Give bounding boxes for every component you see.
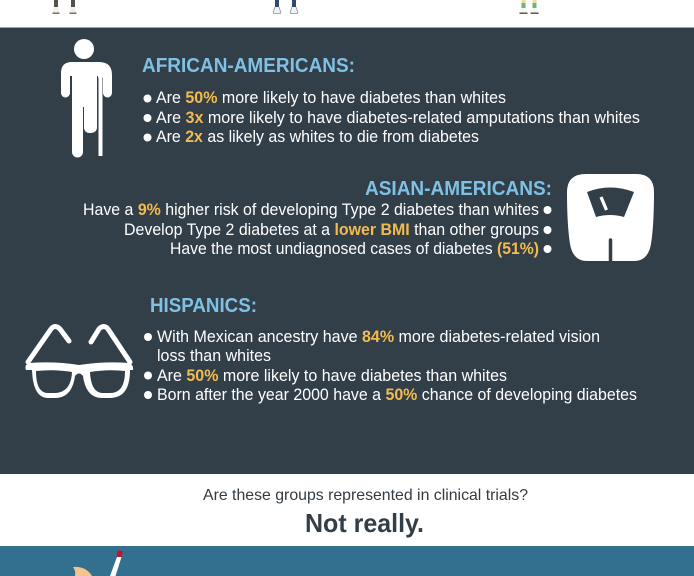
panel: blue bottom band	[0, 546, 694, 576]
heading: Asian-Americans: ASIAN-AMERICANS:	[365, 178, 552, 200]
text block: African-American facts: Are 2x as likely as whites to die from diabetes	[156, 127, 479, 146]
text block: Hispanic facts: Born after the year 2000 have a 50% chance of developing diabetes	[157, 385, 637, 404]
text block: Hispanic facts: Are 50% more likely to have diabetes than whites	[157, 366, 507, 385]
text block: African-American facts: Are 50% more likely to have diabetes than whites	[156, 88, 506, 107]
icon: person with amputated leg and crutch	[61, 39, 112, 158]
icon: lancet	[110, 550, 123, 576]
panel: dark demographics panel	[0, 27, 694, 474]
text block: Hispanic facts: loss than whites	[157, 346, 271, 365]
text block: Asian-American facts: Have a 9% higher risk of developing Type 2 diabetes than whites	[83, 200, 539, 219]
text block: African-American facts: Are 3x more likely to have diabetes-related amputations than whites	[156, 108, 640, 127]
icon: peach hand	[73, 567, 92, 576]
icon: eyeglasses	[25, 326, 133, 398]
icon: shoes, second group	[273, 0, 298, 14]
text: answer: Not really.	[305, 508, 424, 538]
heading: Hispanics: HISPANICS:	[150, 295, 257, 317]
text block: Asian-American facts	[83, 200, 552, 258]
text block: Hispanic facts	[144, 327, 637, 404]
text block: Hispanic facts: With Mexican ancestry have 84% more diabetes-related vision	[157, 327, 600, 346]
text block: African-American facts	[144, 88, 640, 146]
icon: bathroom scale	[567, 174, 654, 261]
text block: Asian-American facts: Have the most undiagnosed cases of diabetes (51%)	[170, 239, 539, 258]
icon: shoes, third group	[520, 0, 538, 14]
text: clinical trials question: Are these groups represented in clinical trials?	[203, 487, 528, 504]
heading: African-Americans: AFRICAN-AMERICANS:	[142, 55, 355, 77]
icon: shoes, first group	[52, 0, 76, 14]
text block: Asian-American facts: Develop Type 2 diabetes at a lower BMI than other groups	[124, 220, 539, 239]
